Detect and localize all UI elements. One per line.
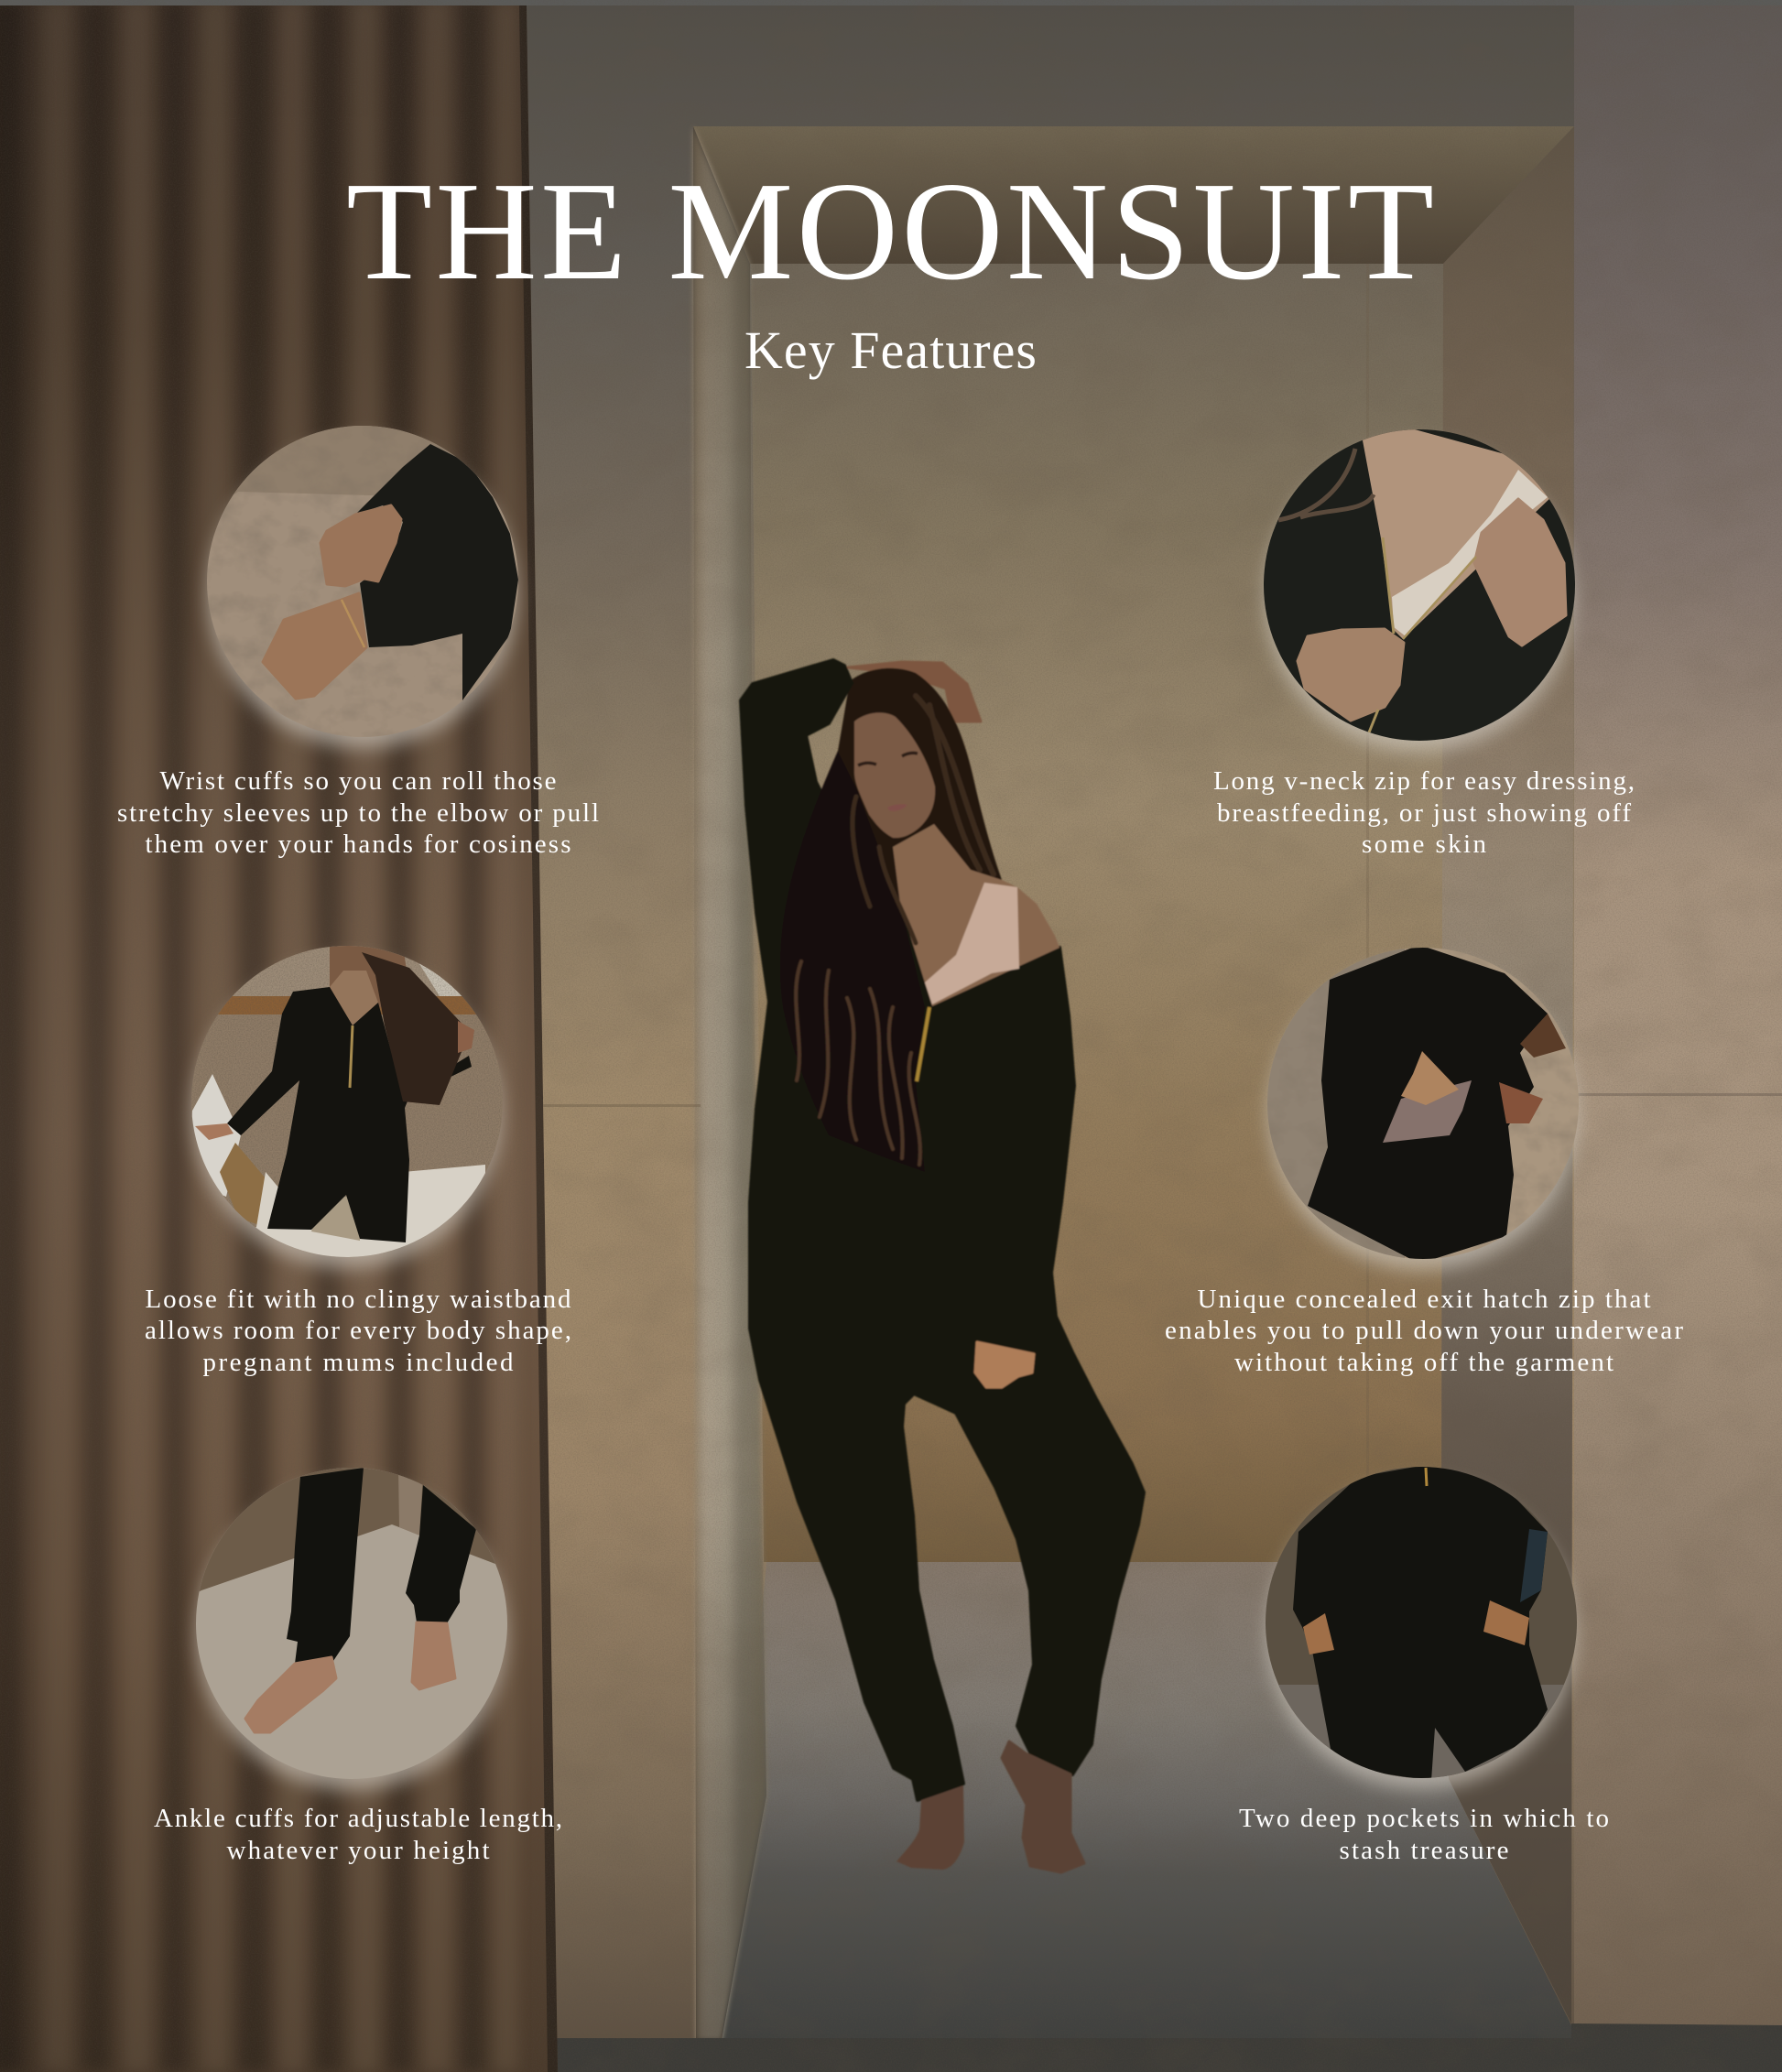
feature circle: ankle cuffs <box>196 1468 507 1790</box>
caption: wrist cuffs: stretchy sleeves up to the elbow or pull <box>117 798 599 828</box>
caption: v-neck zip: breastfeeding, or just showing off <box>1217 798 1631 828</box>
feature circle: wrist cuffs <box>207 426 518 748</box>
bottom step <box>549 2023 1782 2072</box>
caption: ankle cuffs <box>154 1804 562 1865</box>
feature circle: deep pockets <box>1266 1465 1577 1789</box>
hand on thigh <box>975 1342 1034 1387</box>
subtitle: Key Features <box>744 320 1037 380</box>
raised forearm and hand <box>848 662 981 721</box>
caption: v-neck zip: Long v-neck zip for easy dressing, <box>1213 766 1635 796</box>
caption: exit hatch zip: without taking off the garment <box>1234 1348 1614 1377</box>
main figure: model in black moonsuit <box>741 660 1144 1872</box>
caption: deep pockets: stash treasure <box>1339 1836 1509 1865</box>
floor <box>722 1562 1571 2040</box>
caption: exit hatch zip <box>1165 1285 1683 1377</box>
caption: deep pockets <box>1239 1804 1609 1865</box>
feature circle: loose fit <box>188 946 503 1268</box>
chest skin <box>893 824 1059 1006</box>
caption: exit hatch zip: enables you to pull down your underwear <box>1165 1316 1683 1345</box>
caption: exit hatch zip: Unique concealed exit hatch zip that <box>1198 1285 1650 1314</box>
curtain <box>0 0 568 2072</box>
feature circle: v-neck zip <box>1264 421 1575 752</box>
caption: loose fit: Loose fit with no clingy waistband <box>145 1285 571 1314</box>
lace top <box>925 883 1019 1004</box>
caption: deep pockets: Two deep pockets in which to <box>1239 1804 1609 1833</box>
caption: wrist cuffs: Wrist cuffs so you can roll those <box>159 766 557 796</box>
moonsuit silhouette <box>741 660 1144 1800</box>
right door reveal <box>1441 126 1574 2023</box>
back wall <box>751 264 1443 1562</box>
caption: wrist cuffs: them over your hands for cosiness <box>145 830 571 859</box>
caption: ankle cuffs: whatever your height <box>227 1836 489 1865</box>
left foot <box>896 1785 964 1870</box>
caption: loose fit: pregnant mums included <box>203 1348 514 1377</box>
left pilaster <box>693 126 766 2040</box>
caption: wrist cuffs <box>117 766 599 859</box>
caption: v-neck zip: some skin <box>1362 830 1487 859</box>
right foot <box>1002 1741 1084 1872</box>
face <box>854 712 935 838</box>
feature circle: concealed hatch zip <box>1267 945 1579 1270</box>
front hair strands <box>780 696 994 1172</box>
door soffit <box>693 126 1574 264</box>
facial features <box>858 753 918 811</box>
caption: loose fit: allows room for every body shape, <box>145 1316 571 1345</box>
caption: loose fit <box>145 1285 571 1377</box>
caption: v-neck zip <box>1213 766 1635 859</box>
long hair back <box>824 668 1002 906</box>
gold zipper <box>917 1007 929 1081</box>
title: THE MOONSUIT <box>346 154 1434 309</box>
caption: ankle cuffs: Ankle cuffs for adjustable length, <box>154 1804 562 1833</box>
